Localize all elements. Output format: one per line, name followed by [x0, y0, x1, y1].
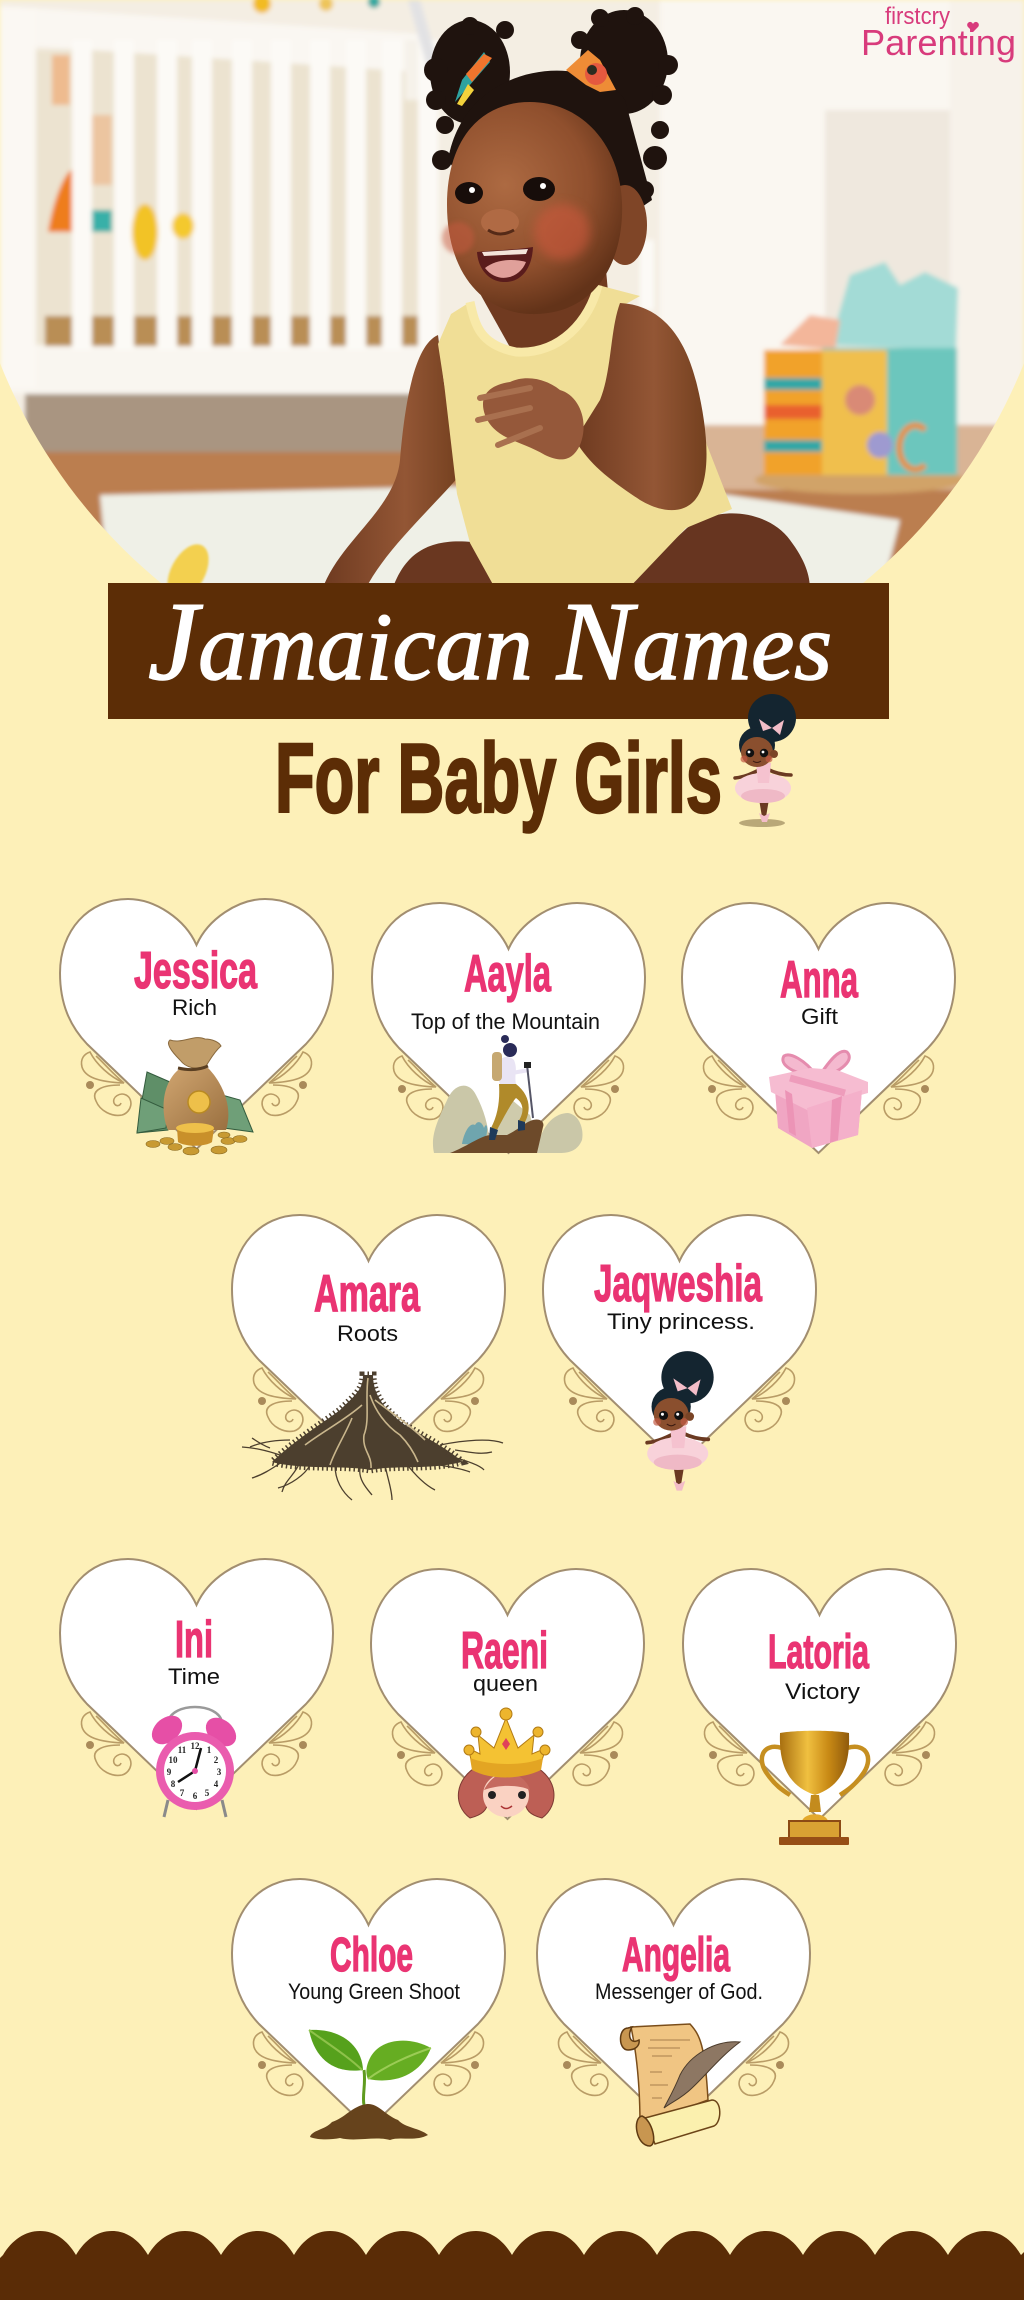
- icon: tree roots: [242, 1375, 503, 1500]
- icon: pink alarm clock: 12: [190, 1741, 200, 1751]
- name: Jaqweshia: Jaqweshia: [594, 1255, 763, 1313]
- icon: girl with golden crown: [458, 1708, 554, 1818]
- icon: pink gift box: [769, 1051, 868, 1148]
- icon: hiker on a mountain: [433, 1035, 582, 1153]
- icon: pink alarm clock: 10: [168, 1755, 178, 1765]
- icon: ballerina shadow: [739, 819, 785, 827]
- meaning: Messenger of God.: Messenger of God.: [595, 1979, 763, 2004]
- toy: [166, 542, 210, 583]
- hair clips: [455, 52, 490, 102]
- icon: pink alarm clock: 3: [217, 1767, 222, 1777]
- hair puffs: [424, 7, 678, 222]
- icon: golden trophy: [762, 1731, 868, 1845]
- meaning: Time: Time: [168, 1664, 220, 1689]
- meaning: queen: queen: [473, 1671, 538, 1696]
- panel: Anna: [682, 903, 955, 1153]
- icon: pink alarm clock: 7: [180, 1788, 185, 1798]
- panel: Chloe: [232, 1879, 505, 2140]
- face: [447, 102, 622, 314]
- panel: Aayla: [372, 903, 645, 1153]
- panel: Ini: [60, 1559, 333, 1817]
- meaning: Young Green Shoot: Young Green Shoot: [288, 1979, 460, 2004]
- icon: pink alarm clock: 11: [178, 1745, 187, 1755]
- panel: Angelia: [537, 1879, 810, 2146]
- name: Ini: Ini: [175, 1611, 213, 1669]
- ear: [614, 185, 647, 265]
- panel: Jaqweshia: [543, 1215, 816, 1491]
- meaning: Gift: Gift: [801, 1004, 838, 1029]
- icon: pink alarm clock: 4: [214, 1779, 219, 1789]
- hero photo: smiling baby in a nursery: [0, 0, 1024, 623]
- footer: brown scalloped band: [0, 2231, 1024, 2300]
- panel: Raeni: [371, 1569, 644, 1819]
- panel: Latoria: [683, 1569, 956, 1845]
- logo: FirstCry Parenting: Parenting: [861, 22, 1016, 63]
- icon: green sprout in soil: [309, 2030, 431, 2140]
- icon: pink alarm clock: 1: [207, 1745, 212, 1755]
- icon: money bag with coins: [137, 1038, 253, 1155]
- baby: [322, 7, 810, 590]
- icon: pink alarm clock: 9: [167, 1767, 172, 1777]
- panel: Jessica: [60, 899, 333, 1155]
- icon: pink alarm clock: 2: [214, 1755, 219, 1765]
- title banner: [108, 580, 889, 719]
- logo: FirstCry Parenting: [861, 3, 1016, 63]
- meaning: Tiny princess.: Tiny princess.: [607, 1309, 755, 1334]
- name: Aayla: Aayla: [464, 945, 552, 1003]
- name: Jessica: Jessica: [134, 942, 258, 1000]
- title: Jamaican Names: Jamaican Names: [148, 580, 832, 704]
- nursery background: [0, 0, 1024, 600]
- icon: pink alarm clock: 6: [193, 1791, 198, 1801]
- name: Chloe: Chloe: [330, 1929, 413, 1982]
- meaning: Roots: Roots: [337, 1321, 398, 1346]
- icon: scroll and feather quill: [620, 2024, 740, 2146]
- name: Amara: Amara: [314, 1265, 421, 1323]
- subtitle: For Baby Girls: For Baby Girls: [275, 723, 722, 833]
- icon: ballerina girl in header: [735, 694, 796, 822]
- name: Anna: Anna: [780, 951, 859, 1009]
- icon: ballerina girl: [647, 1351, 714, 1491]
- logo: FirstCry Parenting: firstcry: [885, 3, 950, 30]
- panel: Amara: [232, 1215, 505, 1500]
- meaning: Rich: Rich: [172, 995, 217, 1020]
- meaning: Victory: Victory: [785, 1679, 860, 1704]
- name: Latoria: Latoria: [768, 1626, 869, 1679]
- name: Angelia: Angelia: [622, 1929, 730, 1982]
- icon: pink alarm clock: 8: [171, 1779, 176, 1789]
- meaning: Top of the Mountain: Top of the Mountain: [411, 1009, 600, 1034]
- icon: pink alarm clock: 5: [205, 1788, 210, 1798]
- name: Raeni: Raeni: [461, 1622, 548, 1680]
- icon: pink alarm clock: [146, 1707, 242, 1817]
